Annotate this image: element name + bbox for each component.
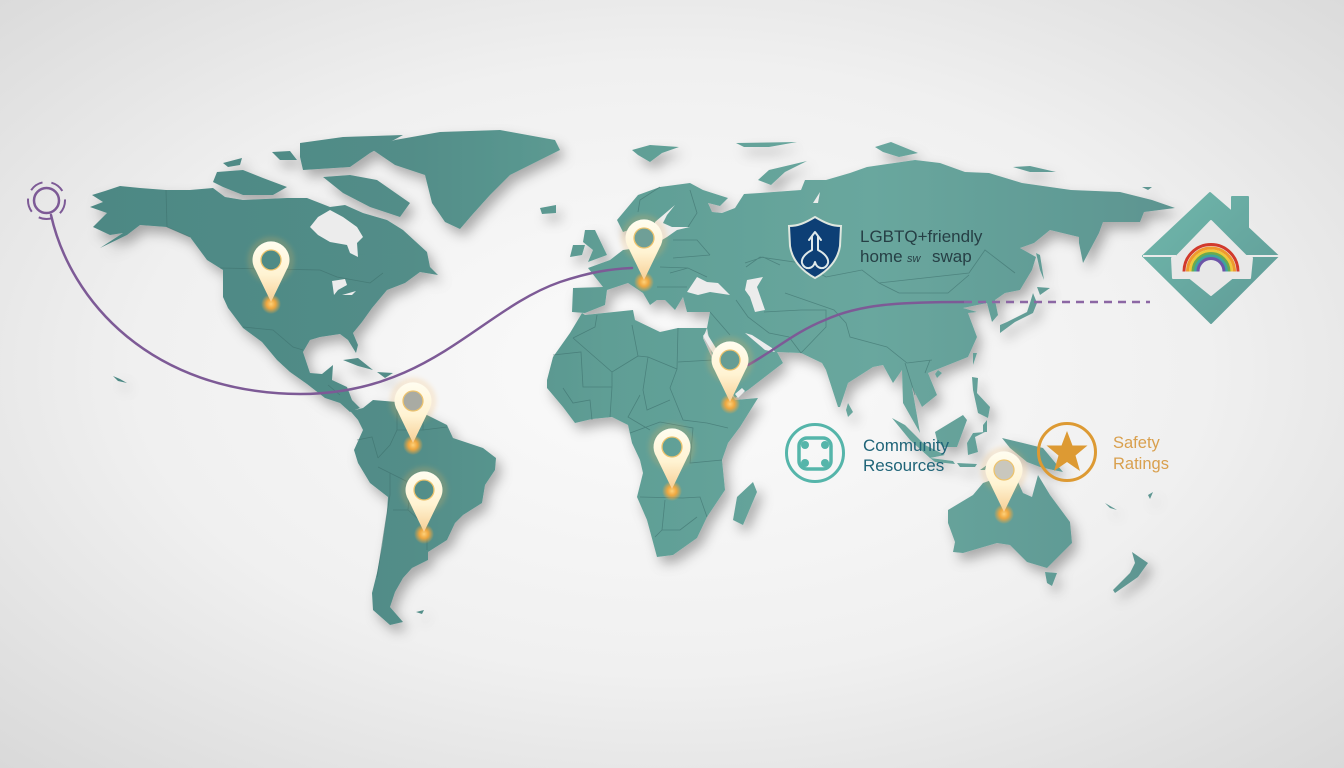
world map [90, 130, 1175, 625]
Borneo and Sulawesi [935, 415, 987, 455]
Africa [547, 310, 758, 557]
Sumatra, Java and Lesser Sunda [892, 418, 987, 470]
South America [345, 400, 496, 625]
icon: home with rainbow [1143, 193, 1279, 323]
text: Community Resources: Community [863, 436, 949, 455]
Australia [948, 475, 1072, 568]
route: curved path from East Africa to East Asia [748, 302, 964, 365]
text: LGBTQ+friendly home swap: swap [932, 247, 972, 266]
Canadian Arctic islands [213, 135, 410, 217]
location pin: East Africa [710, 340, 750, 414]
Sri Lanka, Taiwan, Hainan, Philippines [846, 353, 990, 418]
route: dashed origin circle [28, 182, 65, 219]
location pin: Central Africa [652, 427, 692, 501]
location pin: Australia [984, 450, 1024, 524]
Eurasia [572, 160, 1175, 433]
route: dashed path to home icon [964, 301, 1150, 303]
text: LGBTQ+friendly home swap: home [860, 247, 903, 266]
New Zealand [1113, 552, 1148, 593]
route: curved path from Pacific to Europe [51, 215, 632, 394]
Greenland [370, 130, 560, 229]
Arctic Eurasian islands [632, 142, 1152, 190]
text: Community Resources [863, 436, 949, 475]
text: Safety Ratings: Safety [1113, 434, 1161, 452]
text: Community Resources: Resources [863, 456, 944, 475]
text: LGBTQ+friendly home swap: sw [907, 253, 922, 265]
Pacific islands [1105, 492, 1153, 510]
icon: shield [789, 217, 841, 278]
location pin: northern South America [393, 381, 433, 455]
icon: safety star [1038, 424, 1096, 480]
text: Safety Ratings: Ratings [1113, 455, 1169, 473]
text: Safety Ratings [1113, 434, 1169, 473]
Iceland [540, 205, 556, 214]
country borders [166, 187, 1015, 577]
Caribbean and Hawaii [113, 358, 393, 383]
icon: community resources [786, 424, 844, 482]
Madagascar [733, 482, 757, 525]
inland seas [310, 192, 820, 398]
location pin: North America [251, 240, 291, 314]
location pin: Europe [624, 218, 664, 292]
text: LGBTQ+friendly home swap [860, 227, 983, 266]
New Guinea [1002, 438, 1063, 472]
North America [90, 186, 438, 412]
location pin: southern South America [404, 470, 444, 544]
UK and Ireland [570, 230, 607, 262]
Tasmania [1045, 572, 1057, 586]
text: LGBTQ+friendly home swap: LGBTQ+friendly [860, 227, 983, 246]
Japan and Sakhalin [1000, 253, 1050, 333]
